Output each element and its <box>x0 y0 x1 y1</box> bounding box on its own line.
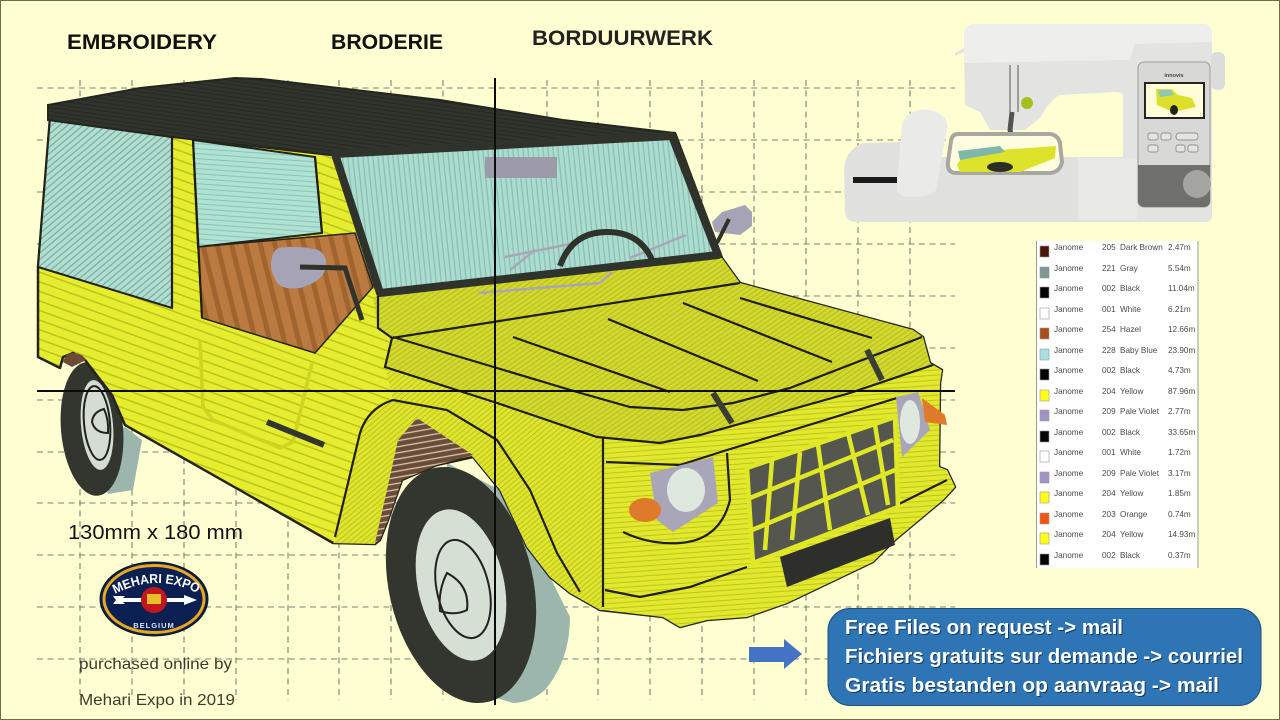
embroidered car <box>38 78 955 718</box>
row 1: 2.47m <box>1168 243 1191 252</box>
row 14 <box>1040 510 1191 524</box>
row 4: 6.21m <box>1168 305 1191 314</box>
row 2: 221 <box>1102 264 1116 273</box>
row 15 <box>1040 530 1195 544</box>
cowl <box>373 258 740 338</box>
row 12 <box>1040 469 1191 483</box>
row 11: 1.72m <box>1168 448 1191 457</box>
presser foot <box>1010 112 1013 142</box>
row 6: 23.90m <box>1168 346 1195 355</box>
row 2: Gray <box>1120 264 1139 273</box>
license plate <box>780 518 895 587</box>
left headlight <box>629 457 718 532</box>
row 1: 205 <box>1102 243 1116 252</box>
row 6: 228 <box>1102 346 1116 355</box>
row 9 <box>1040 407 1191 421</box>
row 13: 1.85m <box>1168 489 1191 498</box>
row 14: 0.74m <box>1168 510 1191 519</box>
row 2: 5.54m <box>1168 264 1191 273</box>
purchase note <box>79 656 235 709</box>
row 7 <box>1040 366 1191 380</box>
arrow <box>749 639 802 669</box>
row 7: Black <box>1120 366 1141 375</box>
thread colour chart <box>1036 241 1198 568</box>
row 10: 33.65m <box>1168 428 1195 437</box>
door handle <box>267 422 324 445</box>
row 4 <box>1040 305 1191 319</box>
carriage slot <box>853 177 897 183</box>
embroidery carriage <box>897 109 947 197</box>
row 13: Janome <box>1054 489 1084 498</box>
hand wheel <box>1211 52 1225 90</box>
row 10: Janome <box>1054 428 1084 437</box>
purchase note: purchased online by <box>79 656 232 673</box>
row 12: 3.17m <box>1168 469 1191 478</box>
heading: broderie: BRODERIE <box>331 31 443 54</box>
front face <box>603 365 955 627</box>
machine base <box>844 142 1210 222</box>
fender band <box>333 400 603 610</box>
crosshair lines <box>37 78 955 705</box>
row 10: 002 <box>1102 428 1116 437</box>
door groove <box>200 340 312 448</box>
row 13: Yellow <box>1120 489 1143 498</box>
row 3: Janome <box>1054 284 1084 293</box>
control panel: innovis <box>1164 73 1184 79</box>
row 4: White <box>1120 305 1141 314</box>
callout: free files: Gratis bestanden op aanvraag -> mail <box>846 676 1220 698</box>
row 5 <box>1040 325 1195 339</box>
right mirror <box>712 205 752 243</box>
row 14: 203 <box>1102 510 1116 519</box>
row 3: 11.04m <box>1168 284 1195 293</box>
row 7: 002 <box>1102 366 1116 375</box>
row 10: Black <box>1120 428 1141 437</box>
row 9: Pale Violet <box>1120 407 1160 416</box>
car body <box>38 118 955 627</box>
fender side <box>385 367 603 610</box>
rearview mirror <box>485 157 557 178</box>
row 16: Black <box>1120 551 1141 560</box>
row 12: Janome <box>1054 469 1084 478</box>
roof <box>48 78 675 155</box>
logo: Mehari Expo <box>100 562 208 636</box>
row 7: 4.73m <box>1168 366 1191 375</box>
row 8: 204 <box>1102 387 1116 396</box>
panel flower <box>1183 170 1211 198</box>
embroidery hoop <box>948 134 1062 173</box>
wipers <box>478 235 686 293</box>
row 3 <box>1040 284 1195 298</box>
left mirror <box>271 247 362 320</box>
callout: free files: Fichiers gratuits sur demande -> courriel <box>846 647 1244 669</box>
row 15: 204 <box>1102 530 1116 539</box>
row 10 <box>1040 428 1195 442</box>
size label: 130mm x 180 mm <box>68 522 243 544</box>
heading: embroidery: EMBROIDERY <box>67 31 217 54</box>
callout: free files: Free Files on request -> mail <box>845 617 1123 639</box>
base shade <box>1078 158 1138 220</box>
row 16: Janome <box>1054 551 1084 560</box>
row 14: Orange <box>1120 510 1148 519</box>
arm top panel <box>964 24 1212 63</box>
hood latches <box>713 350 882 423</box>
windshield <box>335 136 718 293</box>
door window <box>193 140 322 247</box>
needle bars <box>1010 65 1018 112</box>
interior seat <box>198 233 373 353</box>
row 5: Hazel <box>1120 325 1141 334</box>
steering wheel <box>560 232 652 266</box>
row 16 <box>1040 551 1191 565</box>
control panel <box>1138 62 1211 207</box>
screen car <box>1156 89 1196 115</box>
machine arm and column <box>955 24 1212 222</box>
logo: Mehari Expo: MEHARI EXPO <box>112 574 200 594</box>
row 12: 209 <box>1102 469 1116 478</box>
logo: Mehari Expo: BELGIUM <box>133 621 175 630</box>
rear wheel <box>55 360 142 498</box>
right headlight <box>896 392 947 457</box>
rear arch <box>63 353 86 367</box>
purchase note: Mehari Expo in 2019 <box>79 692 235 709</box>
hood <box>385 283 933 443</box>
row 6: Janome <box>1054 346 1084 355</box>
row 15: 14.93m <box>1168 530 1195 539</box>
row 12: Pale Violet <box>1120 469 1160 478</box>
row 16: 002 <box>1102 551 1116 560</box>
callout: free files: Free Files on request -> mail <box>846 618 1124 640</box>
row 1 <box>1040 243 1191 257</box>
callout: free files: Fichiers gratuits sur demande -> courriel <box>845 646 1243 668</box>
row 11: Janome <box>1054 448 1084 457</box>
callout: free files: Gratis bestanden op aanvraag -> mail <box>845 675 1219 697</box>
panel buttons <box>1148 133 1198 152</box>
row 11 <box>1040 448 1191 462</box>
row 1: Janome <box>1054 243 1084 252</box>
row 9: Janome <box>1054 407 1084 416</box>
row 8: Yellow <box>1120 387 1143 396</box>
row 5: Janome <box>1054 325 1084 334</box>
row 11: 001 <box>1102 448 1116 457</box>
callout: free files <box>828 608 1261 706</box>
row 3: Black <box>1120 284 1141 293</box>
row 9: 2.77m <box>1168 407 1191 416</box>
rear side window <box>38 118 172 308</box>
row 8 <box>1040 387 1195 401</box>
measurement grid <box>37 80 955 700</box>
row 15: Janome <box>1054 530 1084 539</box>
row 2: Janome <box>1054 264 1084 273</box>
row 8: Janome <box>1054 387 1084 396</box>
heading: borduurwerk: BORDUURWERK <box>532 27 713 50</box>
row 3: 002 <box>1102 284 1116 293</box>
body outlines <box>172 137 947 607</box>
radiator grille <box>747 417 898 563</box>
wheel arch <box>375 418 473 543</box>
row 5: 254 <box>1102 325 1116 334</box>
row 1: Dark Brown <box>1120 243 1163 252</box>
row 2 <box>1040 264 1191 278</box>
row 9: 209 <box>1102 407 1116 416</box>
front wheel <box>364 452 570 718</box>
row 4: 001 <box>1102 305 1116 314</box>
row 13: 204 <box>1102 489 1116 498</box>
row 8: 87.96m <box>1168 387 1195 396</box>
row 11: White <box>1120 448 1141 457</box>
row 6 <box>1040 346 1195 360</box>
LCD screen <box>1145 83 1204 118</box>
row 14: Janome <box>1054 510 1084 519</box>
start button <box>1021 97 1033 109</box>
row 4: Janome <box>1054 305 1084 314</box>
row 6: Baby Blue <box>1120 346 1158 355</box>
row 5: 12.66m <box>1168 325 1195 334</box>
row 13 <box>1040 489 1191 503</box>
row 15: Yellow <box>1120 530 1143 539</box>
row 16: 0.37m <box>1168 551 1191 560</box>
row 7: Janome <box>1054 366 1084 375</box>
embroidery machine <box>844 24 1225 222</box>
